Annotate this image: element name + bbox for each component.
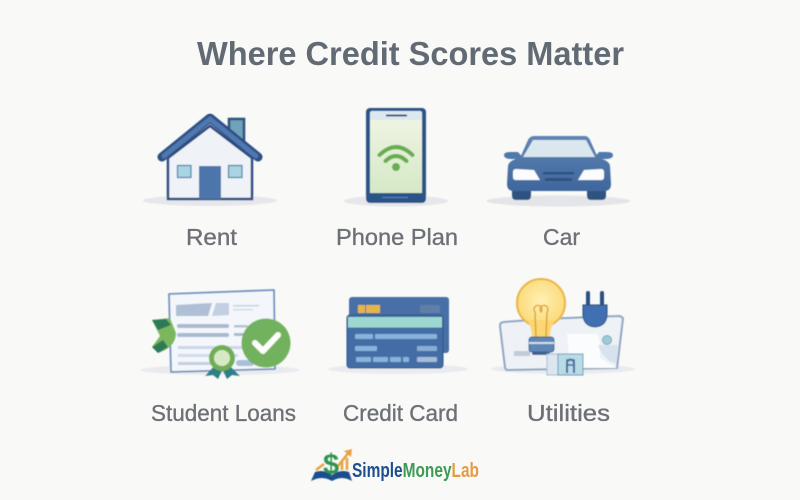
label: utilities: Utilities [527, 400, 610, 426]
icon: credit cards [328, 297, 468, 374]
icon: book, dollar and growth arrow: $ [323, 449, 339, 481]
wordmark: SimpleMoneyLab [352, 460, 479, 482]
panel: utilities [491, 279, 635, 426]
icon: car [486, 136, 630, 206]
icon: phone with wifi [344, 108, 448, 206]
panel: student loans [140, 290, 300, 426]
panel: phone plan [336, 108, 458, 250]
panel: rent [143, 118, 277, 250]
panel: credit card [328, 297, 468, 426]
icon: book, dollar and growth arrow [311, 449, 352, 481]
icon: bulb, plug and bill [491, 279, 635, 375]
label: student loans: Student Loans [151, 400, 296, 426]
icon: loan document with check and seal [140, 290, 300, 379]
panel: car [486, 136, 630, 250]
label: car: Car [543, 224, 580, 250]
title: Where Credit Scores Matter [197, 35, 624, 72]
logo: SimpleMoneyLab [311, 449, 479, 482]
icon: house [143, 118, 277, 206]
label: phone plan: Phone Plan [336, 224, 458, 250]
label: rent: Rent [186, 224, 237, 250]
label: credit card: Credit Card [343, 400, 458, 426]
